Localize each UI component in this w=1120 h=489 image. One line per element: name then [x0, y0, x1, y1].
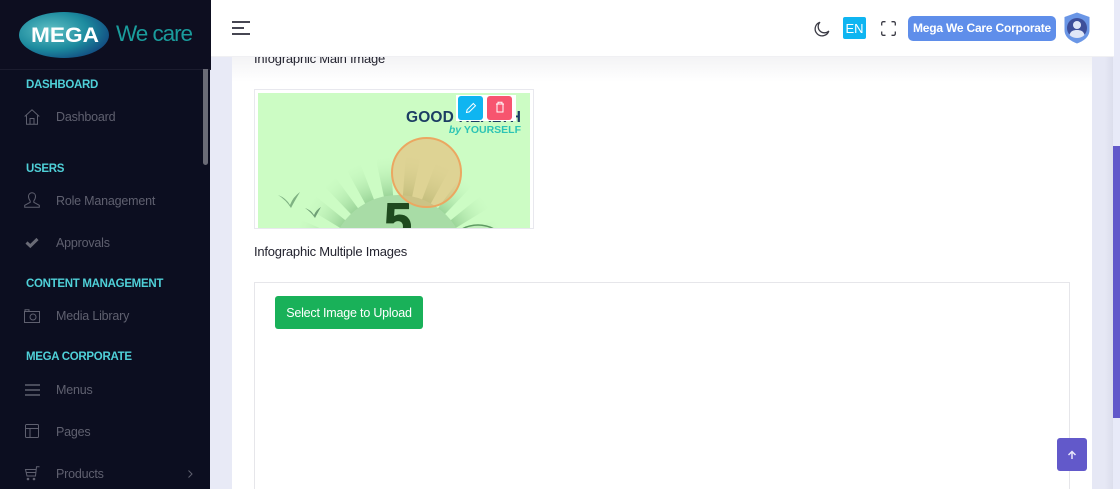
- button backing: [456, 95, 516, 121]
- nav item: role management: Role Management: [56, 194, 155, 208]
- language button: EN: [845, 21, 864, 36]
- sun rays: [292, 153, 504, 263]
- nav item: pages: Pages: [56, 425, 90, 439]
- icon: cart: [24, 466, 40, 480]
- back to top button: [1057, 438, 1087, 471]
- account name button: [908, 16, 1056, 41]
- icon: home: [24, 109, 40, 125]
- right gutter shading: [1092, 56, 1113, 489]
- sun disc: [330, 195, 466, 331]
- icon: page layout: [25, 424, 39, 438]
- icon: user shield avatar: [1064, 12, 1090, 44]
- label: infographic main image: Infographic Main Image: [254, 51, 385, 66]
- icon: check: [26, 238, 38, 248]
- image preview frame: [254, 89, 534, 229]
- logo area: [0, 0, 211, 70]
- icon: dark mode moon: [814, 22, 830, 36]
- main content card: [232, 0, 1092, 489]
- icon: arrow up: [1068, 450, 1076, 459]
- infographic thumbnail: [258, 93, 530, 228]
- nav item: approvals: Approvals: [56, 236, 110, 250]
- top header bar: [211, 0, 1114, 57]
- label: infographic multiple images: Infographic Multiple Images: [254, 244, 407, 259]
- section: users: USERS: [26, 163, 64, 175]
- logo: mega oval: MEGA: [31, 24, 99, 47]
- sidebar: [0, 0, 210, 489]
- nav item: media library: Media Library: [56, 309, 129, 323]
- nav item: dashboard: Dashboard: [56, 110, 115, 124]
- nav item: products: Products: [56, 467, 104, 481]
- icon: trash: [496, 102, 504, 112]
- second circle outline: [445, 225, 511, 291]
- icon: fullscreen: [881, 21, 896, 36]
- delete button: [487, 96, 512, 120]
- logo: mega oval: [19, 12, 109, 58]
- header shadow: [232, 56, 1092, 82]
- icon: pencil: [466, 102, 476, 114]
- thumbnail artwork: sun, birds and number: [278, 109, 522, 228]
- logo: we care wordmark: We care: [116, 21, 192, 46]
- select image button: [275, 296, 423, 329]
- page scrollbar: [1113, 0, 1120, 489]
- section: dashboard: DASHBOARD: [26, 79, 98, 91]
- section: mega corporate: MEGA CORPORATE: [26, 351, 132, 363]
- icon: hamburger menu: [232, 21, 250, 35]
- subtitle: by yourself: by YOURSELF: [449, 124, 522, 136]
- nav item: menus: Menus: [56, 383, 93, 397]
- account name button: Mega We Care Corporate: [913, 21, 1051, 35]
- section: content management: CONTENT MANAGEMENT: [26, 278, 163, 290]
- select image button: Select Image to Upload: [286, 306, 412, 320]
- icon: menu lines: [25, 384, 40, 396]
- icon: user: [24, 192, 40, 208]
- title: good health: GOOD HEALTH: [406, 109, 521, 126]
- birds: [278, 192, 300, 208]
- icon: chevron: [188, 470, 192, 478]
- upload panel: [254, 282, 1070, 489]
- edit button: [458, 96, 483, 120]
- cursor highlight circle: [391, 137, 462, 208]
- icon: media camera: [24, 309, 40, 323]
- scrollbar thumb: [1113, 146, 1120, 418]
- sidebar scrollbar: [203, 69, 208, 165]
- language button: [843, 17, 866, 39]
